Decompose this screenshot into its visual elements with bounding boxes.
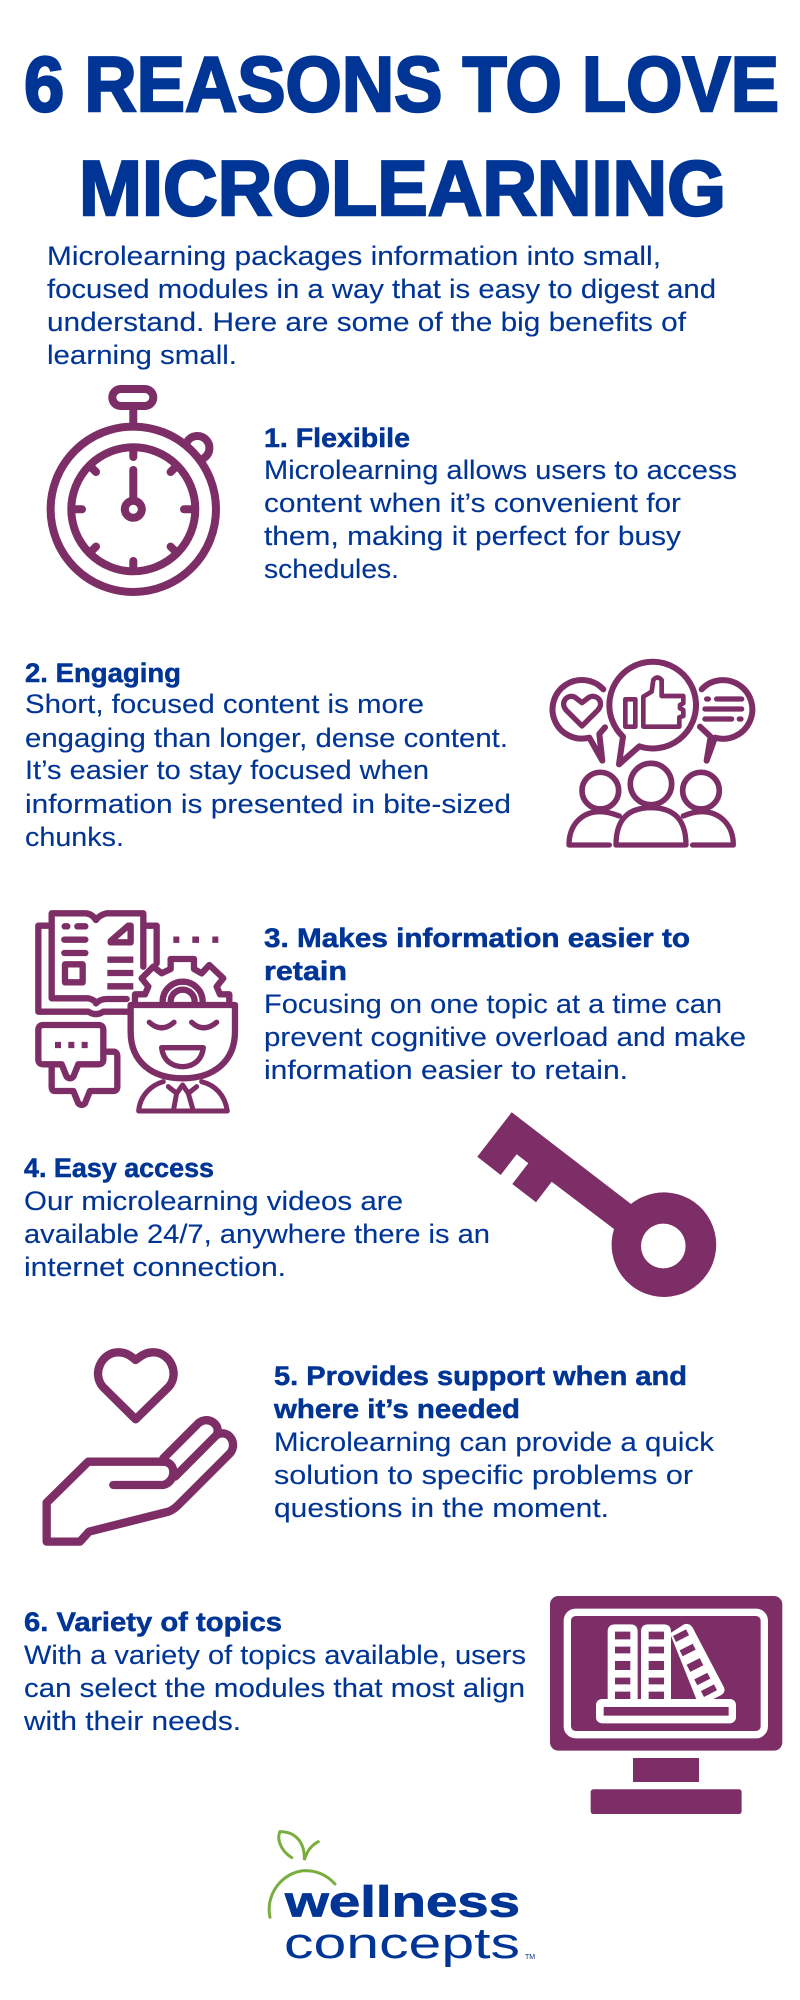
- reason 1 text: Microlearning allows users to access: [264, 455, 737, 485]
- reason 4 text: Our microlearning videos are: [24, 1186, 403, 1216]
- icon: people with speech bubbles: [553, 662, 752, 845]
- reason 5 text: where it’s needed: [273, 1394, 520, 1424]
- reason 4 text: internet connection.: [24, 1252, 286, 1282]
- intro text: learning small.: [47, 340, 237, 370]
- reason 2 text: 2. Engaging: [25, 658, 181, 688]
- reason 3 text: prevent cognitive overload and make: [264, 1022, 746, 1052]
- reason 6 text: with their needs.: [23, 1706, 241, 1736]
- reason 3 text: information easier to retain.: [264, 1055, 628, 1085]
- icon: stopwatch: [51, 389, 216, 592]
- title: [24, 40, 779, 232]
- icon: key: [477, 1112, 716, 1297]
- reason 3 text: Focusing on one topic at a time can: [264, 989, 722, 1019]
- icon: hand holding heart: [47, 1352, 233, 1542]
- reason 6 text: can select the modules that most align: [24, 1673, 525, 1703]
- reason 1 text: content when it’s convenient for: [264, 488, 681, 518]
- logo: wellness concepts: wellness: [284, 1878, 520, 1926]
- reason 2 text: Short, focused content is more: [25, 689, 424, 719]
- reason 1 text: [264, 423, 737, 584]
- reason 2 text: chunks.: [25, 822, 124, 852]
- reason 4 text: 4. Easy access: [24, 1153, 214, 1183]
- reason 2 text: It’s easier to stay focused when: [25, 755, 429, 785]
- reason 3 text: 3. Makes information easier to: [264, 923, 690, 953]
- reason 2 text: engaging than longer, dense content.: [25, 723, 508, 753]
- title: MICROLEARNING: [79, 144, 726, 232]
- reason 2 text: [25, 658, 511, 852]
- reason 1 text: schedules.: [264, 554, 399, 584]
- reason 6 text: 6. Variety of topics: [24, 1607, 282, 1637]
- reason 6 text: With a variety of topics available, users: [24, 1640, 526, 1670]
- intro text: focused modules in a way that is easy to digest and: [47, 274, 716, 304]
- icon: book, head and gear: [38, 913, 235, 1111]
- icon: monitor with books: [550, 1596, 782, 1814]
- logo: wellness concepts: TM: [525, 1954, 535, 1961]
- reason 3 text: retain: [264, 956, 347, 986]
- intro text: [47, 241, 716, 370]
- reason 1 text: them, making it perfect for busy: [264, 521, 682, 551]
- reason 5 text: questions in the moment.: [274, 1493, 609, 1523]
- reason 4 text: available 24/7, anywhere there is an: [24, 1219, 490, 1249]
- reason 2 text: information is presented in bite-sized: [25, 789, 511, 819]
- reason 5 text: solution to specific problems or: [274, 1460, 693, 1490]
- reason 4 text: [24, 1153, 490, 1282]
- reason 3 text: [264, 923, 746, 1085]
- reason 5 text: 5. Provides support when and: [274, 1361, 687, 1391]
- reason 5 text: [273, 1361, 715, 1523]
- reason 1 text: 1. Flexibile: [264, 423, 410, 453]
- reason 6 text: [23, 1607, 526, 1736]
- logo: wellness concepts: [269, 1832, 535, 1968]
- logo: wellness concepts: concepts: [284, 1919, 520, 1968]
- intro text: Microlearning packages information into small,: [47, 241, 661, 271]
- intro text: understand. Here are some of the big benefits of: [47, 307, 687, 337]
- reason 5 text: Microlearning can provide a quick: [274, 1427, 715, 1457]
